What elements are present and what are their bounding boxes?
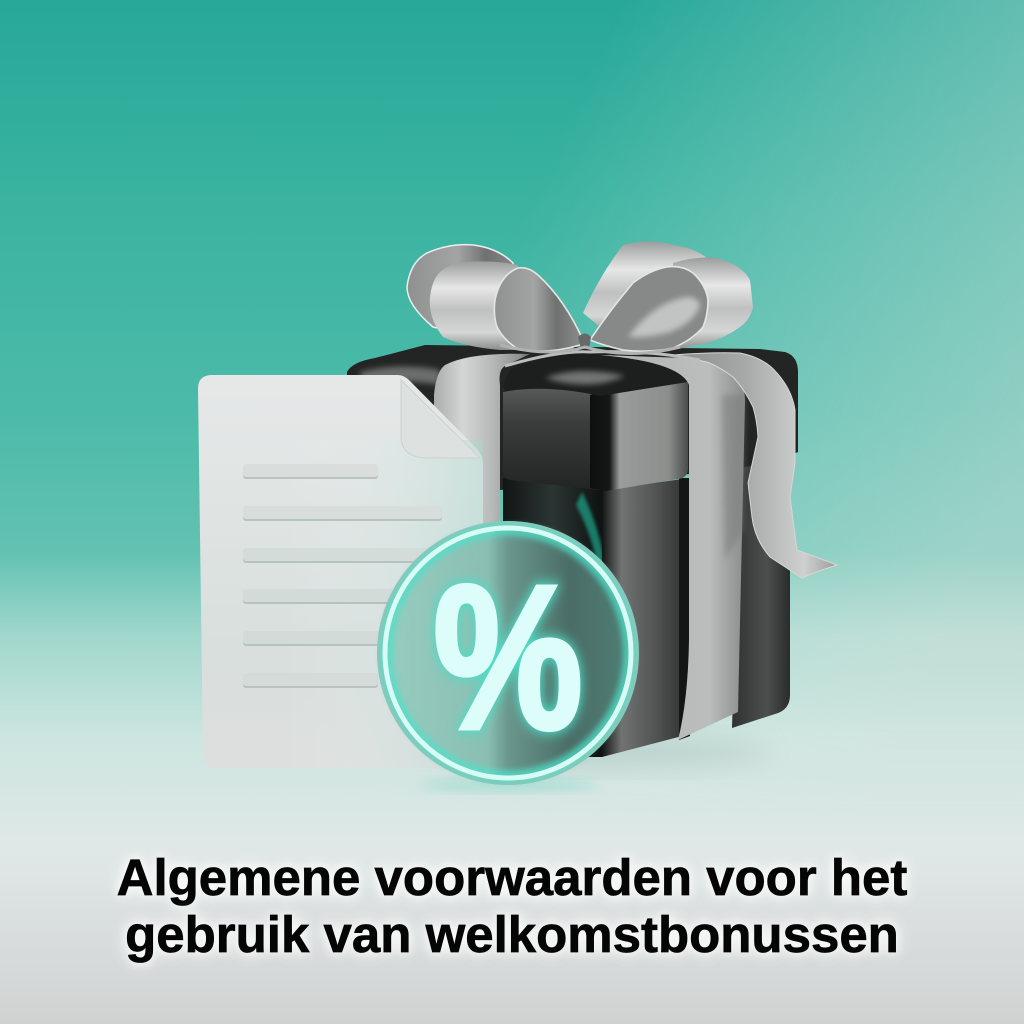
box body left face — [503, 478, 602, 757]
lid top face — [503, 353, 688, 396]
lid top highlight — [545, 371, 625, 385]
left inner loop — [494, 268, 583, 351]
knot — [578, 334, 591, 349]
ring — [385, 528, 631, 778]
text line 1 — [243, 464, 378, 479]
coin glow — [418, 779, 598, 791]
percent coin — [377, 521, 639, 791]
document sheet — [198, 375, 483, 768]
text line 2 — [243, 506, 442, 521]
percent sign: % — [433, 542, 583, 772]
floor shadow — [430, 738, 770, 766]
front left band — [430, 261, 575, 350]
lid left face — [503, 366, 600, 490]
bow — [407, 242, 753, 354]
left ribbon strap — [434, 354, 530, 530]
bow tie lines — [500, 345, 680, 354]
lid right face — [590, 372, 688, 491]
text line 3 — [243, 548, 433, 563]
coin edge — [377, 521, 639, 785]
right inner loop — [590, 267, 708, 351]
front right band — [673, 258, 753, 350]
right ribbon strap — [600, 355, 745, 740]
title — [114, 849, 910, 970]
coin face — [385, 528, 631, 778]
title: Algemene voorwaarden voor het — [117, 849, 907, 906]
title: gebruik van welkomstbonussen — [125, 906, 899, 962]
teal reflection — [576, 492, 612, 610]
ribbon cross highlight — [505, 352, 700, 366]
seam beside ribbon — [679, 478, 690, 740]
box body right face — [602, 478, 690, 757]
ring glow — [387, 530, 629, 776]
text line 5 — [243, 631, 413, 646]
text line 6 — [243, 673, 378, 688]
folded corner — [401, 380, 480, 458]
back right loop — [583, 242, 707, 335]
percent glow: % — [433, 542, 583, 772]
strap shading — [722, 395, 745, 560]
box lid back and top — [347, 345, 798, 490]
back left loop — [407, 245, 520, 345]
document — [198, 375, 483, 768]
right inner loop light — [628, 297, 700, 337]
text line 4 — [243, 589, 413, 604]
gift box — [347, 242, 837, 757]
lid top sheen — [360, 366, 440, 385]
document tint — [198, 440, 483, 768]
box body right side — [732, 458, 790, 728]
ribbon tail — [673, 353, 837, 578]
